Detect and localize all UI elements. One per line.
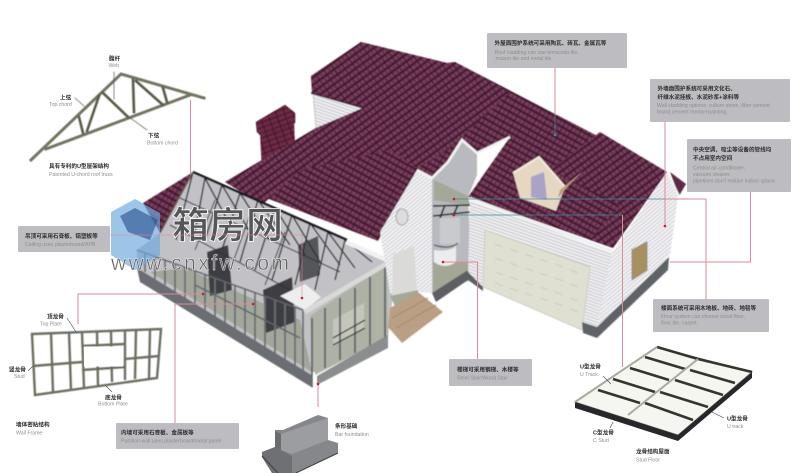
callout: roof cladding: mason tile and metal tile. xyxy=(496,56,553,62)
stud floor diagram: C Stud xyxy=(593,438,609,444)
roof dormer xyxy=(513,157,583,211)
frame xyxy=(32,329,161,395)
wing wall xyxy=(313,93,363,129)
roof truss diagram: 具有专利的U型屋架结构 xyxy=(49,162,109,170)
stud floor diagram: U track xyxy=(727,424,744,430)
floor labels: U型龙骨 xyxy=(580,362,601,370)
chimney xyxy=(256,105,295,172)
watermark text: 箱房网 xyxy=(172,205,283,246)
callout: floor system: Floor system can choose wood floor, xyxy=(661,314,745,320)
callout: roof cladding: Roof cladding can use terracotta tile, xyxy=(494,50,579,56)
house illustration xyxy=(137,42,686,388)
joists xyxy=(598,347,752,420)
callout: stair xyxy=(449,359,532,386)
wall frame diagram: 竖龙骨 xyxy=(9,366,26,374)
callout: ceiling: 吊顶可采用石膏板、铝塑板等 xyxy=(25,232,98,240)
stud floor diagram: 龙骨结构屋面 xyxy=(636,448,670,456)
watermark logo xyxy=(111,199,160,270)
exposed steel frame wing xyxy=(137,172,397,388)
garage door xyxy=(483,230,590,330)
roof truss diagram: Patented U-chord roof truss xyxy=(49,172,113,178)
callout: stair: 楼梯可采用钢梯、木楼等 xyxy=(457,366,519,374)
callout: floor system: floor tile, carpet. xyxy=(661,320,698,326)
entry steps xyxy=(388,292,443,343)
roof truss diagram: Web xyxy=(108,63,119,69)
stud floor diagram: Stud Floor xyxy=(636,458,660,464)
wall frame diagram: Wall Frame xyxy=(16,430,42,436)
callout: partition wall xyxy=(116,423,239,449)
roof truss diagram: Bottom chord xyxy=(147,140,178,146)
callout: pipelines: vacuum cleaner, xyxy=(693,172,731,178)
callout: partition wall: 内墙可采用石膏板、金属板等 xyxy=(121,428,194,436)
callout: pipelines: 中央空调、吸尘等设备的管线均 xyxy=(693,146,772,154)
bar foundation xyxy=(262,415,369,473)
ceiling panel xyxy=(280,284,321,310)
stud floor diagram xyxy=(575,347,752,464)
foundation label: 条形基础 xyxy=(335,422,358,430)
callout: pipelines xyxy=(687,139,791,192)
small roof return xyxy=(670,172,686,196)
watermark text: www.cnxfw.com xyxy=(110,252,289,275)
entry tower and stair hall xyxy=(380,137,510,306)
base xyxy=(432,270,468,302)
stud floor diagram: U Track xyxy=(580,372,598,378)
callout: partition wall: Partition wall uses plasterboard/metal panel xyxy=(121,438,221,444)
truss frame xyxy=(31,72,204,160)
wall base xyxy=(582,257,669,338)
roof trusses xyxy=(170,172,372,290)
callout: wall cladding xyxy=(650,79,790,122)
callout: stair: Steel Stair/Wood Stair xyxy=(457,376,508,382)
wall frame diagram: 墙体密贴结构 xyxy=(16,420,50,428)
left roof remnant xyxy=(143,172,193,233)
round window xyxy=(396,209,408,225)
gable trim xyxy=(417,137,510,178)
callout: pipelines: 不占用室内空间 xyxy=(693,154,733,162)
callout: roof cladding xyxy=(487,33,627,68)
front wall studs xyxy=(145,253,303,372)
leader lines xyxy=(78,68,750,423)
stair hall xyxy=(432,140,477,293)
interior xyxy=(137,172,397,376)
main roof xyxy=(225,42,667,248)
callout: ceiling: Ceiling uses plasterboard/APB xyxy=(25,242,96,248)
wall frame diagram: Top Plate xyxy=(40,322,62,328)
stud floor diagram: U型龙骨 xyxy=(727,414,748,422)
callout: wall cladding: 外墙面围护系统可采用文化石、 xyxy=(658,84,736,92)
right wall xyxy=(597,173,678,327)
wall frame diagram xyxy=(9,312,161,436)
wall frame diagram: Stud xyxy=(14,374,25,380)
callout: floor system xyxy=(653,299,769,332)
spiral stair xyxy=(433,205,472,266)
callout: roof cladding: 外屋面围护系统可采用陶瓦、砖瓦、金属瓦等 xyxy=(494,39,607,47)
callout: wall cladding: 纤维水泥挂板、水泥砂浆+涂料等 xyxy=(658,93,739,101)
frame base xyxy=(137,268,313,388)
callout: ceiling xyxy=(18,226,110,252)
stud floor diagram: C型龙骨 xyxy=(593,428,614,436)
roof truss diagram: 下弦 xyxy=(148,132,160,140)
wall window xyxy=(632,242,647,280)
callout: wall cladding: board,cement mortar+painting. xyxy=(657,110,728,116)
callout: wall cladding: Wall cladding options: culture stone, fiber cement xyxy=(657,103,770,109)
arched entry xyxy=(392,246,417,296)
right wall xyxy=(310,263,388,376)
roof truss diagram: 上弦 xyxy=(60,94,72,102)
right wall studs xyxy=(312,265,385,376)
callout: pipelines: Central air-conditioner, xyxy=(693,166,745,172)
callout: floor system: 楼面系统可采用木地板、地砖、地毯等 xyxy=(661,304,757,312)
truss labels: 腹杆 xyxy=(109,54,121,62)
garage wall and door xyxy=(468,172,686,338)
wall frame diagram: Bottom Plate xyxy=(98,402,128,408)
roof truss diagram: Top chord xyxy=(49,102,72,108)
wall frame labels: 顶龙骨 xyxy=(47,312,64,320)
callout: pipelines: pipelines don't reduce indoor space. xyxy=(693,178,776,184)
watermark text xyxy=(110,205,289,275)
wall frame diagram: 底龙骨 xyxy=(105,394,122,402)
roof truss diagram xyxy=(31,54,204,178)
bar foundation: Bar foundation xyxy=(335,432,369,438)
interior doors xyxy=(207,245,232,296)
